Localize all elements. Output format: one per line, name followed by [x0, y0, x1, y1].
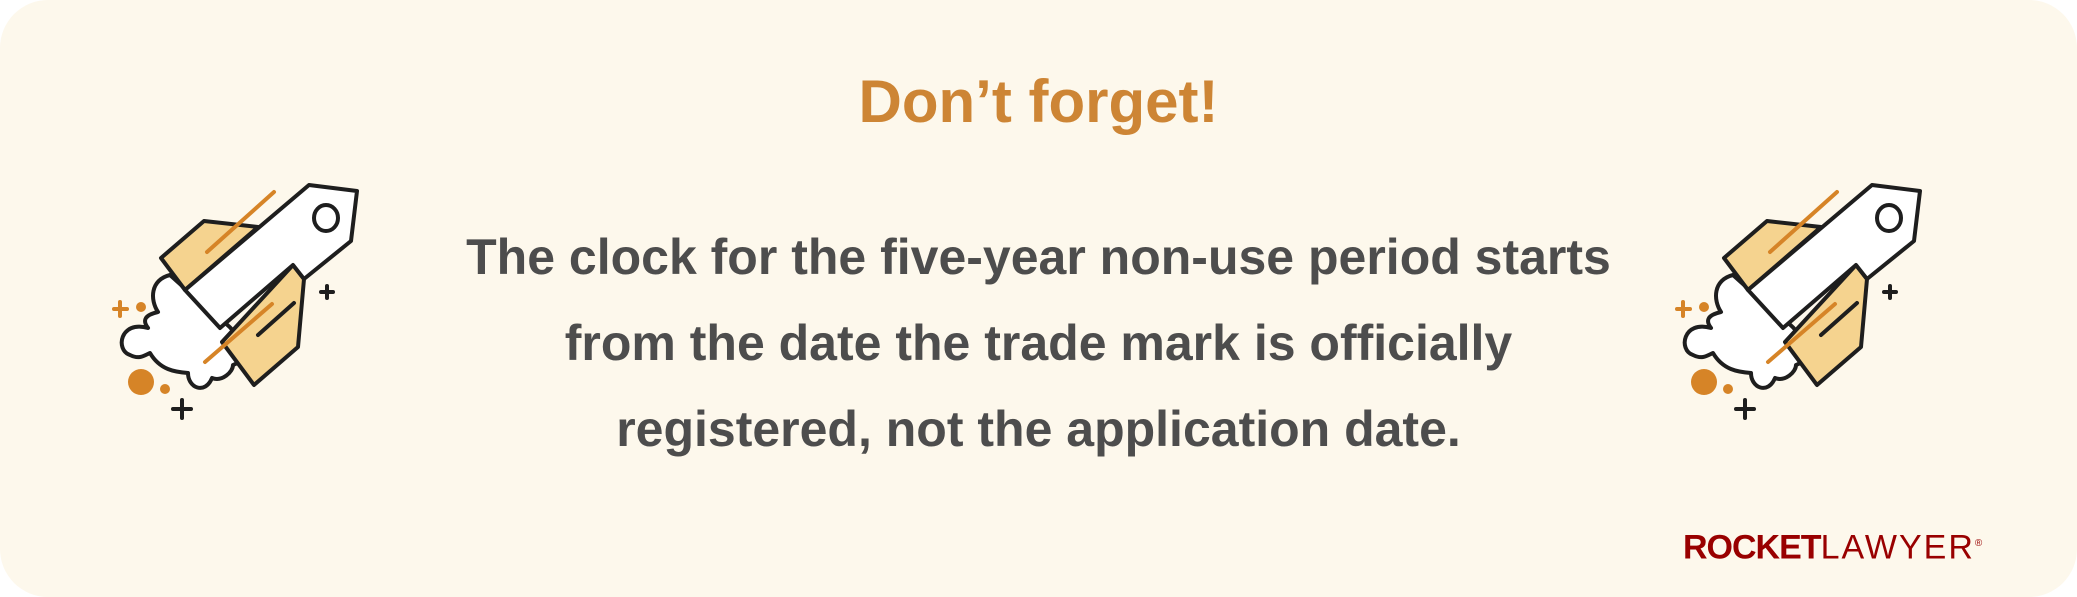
- title: Don’t forget!: [859, 68, 1218, 135]
- text block: message: from the date the trade mark is officially: [565, 315, 1512, 371]
- text block: message: [466, 229, 1611, 457]
- icon: rocket left: [112, 183, 359, 420]
- text block: message: The clock for the five-year non-use period starts: [466, 229, 1611, 285]
- icon: rocket right: [1675, 183, 1922, 420]
- text block: message: registered, not the application date.: [616, 401, 1461, 457]
- logo: Rocket Lawyer: ROCKETLAWYER®: [1683, 528, 1982, 566]
